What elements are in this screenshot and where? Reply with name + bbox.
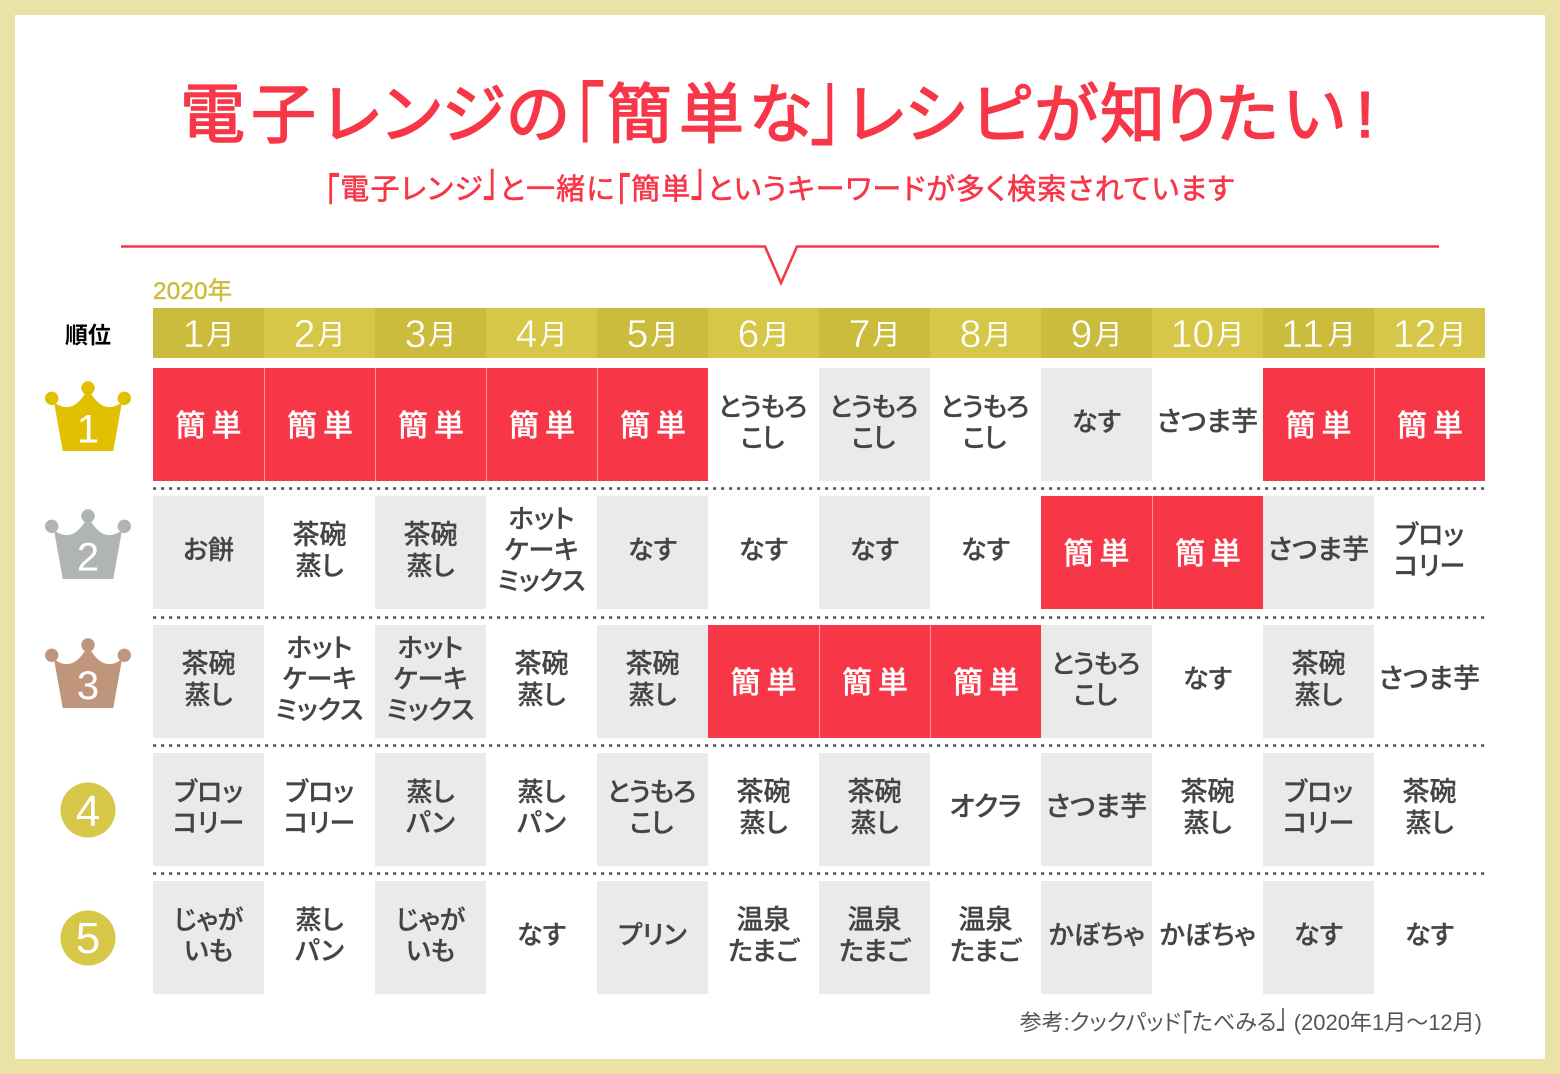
cell: ケーキ — [504, 535, 579, 565]
cell: 簡単 — [1397, 410, 1469, 443]
cell: コリー — [1394, 550, 1465, 580]
cell — [153, 753, 264, 866]
month 6: 月 — [761, 319, 789, 350]
icon: bronze crown rank 3 — [45, 638, 131, 708]
cell: ブロッ — [1284, 776, 1353, 806]
cell — [819, 368, 930, 481]
cell: 簡単 — [730, 667, 802, 700]
cell: たまご — [728, 936, 799, 966]
cell: お餅 — [183, 535, 234, 565]
cell — [1041, 496, 1152, 609]
cell: 茶碗 — [404, 520, 458, 550]
cell — [1402, 776, 1456, 838]
month 7 — [819, 308, 930, 358]
month 1: 月 — [206, 319, 234, 350]
cell: さつま芋 — [1268, 535, 1369, 565]
cell — [718, 392, 806, 452]
cell — [295, 904, 344, 966]
month 6: 6 — [738, 313, 759, 356]
month 8: 月 — [983, 319, 1011, 350]
cell — [597, 625, 708, 738]
cell: とうもろ — [718, 392, 806, 422]
month 3 — [375, 308, 486, 358]
cell — [597, 753, 708, 866]
source note: 参考:クックパッド たべみる (2020年1月〜12月) — [1020, 1010, 1482, 1035]
month 12: 月 — [1438, 319, 1466, 350]
cell: さつま芋 — [1157, 407, 1258, 437]
month 11: 月 — [1328, 319, 1356, 350]
cell: 簡単 — [1286, 410, 1358, 443]
cell: 蒸し — [296, 550, 343, 580]
icon: silver crown rank 2: 2 — [77, 536, 99, 579]
cell: 茶碗 — [1402, 776, 1456, 806]
cell — [153, 625, 264, 738]
cell: こし — [963, 422, 1005, 452]
cell — [1263, 881, 1374, 994]
cell: 蒸し — [850, 808, 898, 838]
cell: 蒸し — [1184, 808, 1231, 838]
cell — [375, 881, 486, 994]
cell: とうもろ — [1051, 648, 1139, 678]
month 7: 7 — [849, 313, 870, 356]
cell — [819, 625, 930, 738]
cell — [1041, 881, 1152, 994]
cell — [1180, 776, 1234, 838]
subtitle: 電子レンジ と一緒に 簡単 というキーワードが多く検索されています — [340, 174, 1235, 206]
cell — [597, 368, 708, 481]
cell: さつま芋 — [1379, 664, 1480, 694]
cell — [1152, 496, 1263, 609]
cell — [819, 753, 930, 866]
cell — [728, 904, 800, 966]
cell: いも — [184, 936, 233, 966]
month 10: 月 — [1216, 319, 1244, 350]
rank 3 row — [153, 625, 1480, 738]
cell: なす — [961, 535, 1010, 565]
source note: 「 — [1181, 1008, 1192, 1048]
cell — [597, 881, 708, 994]
cell: 簡単 — [842, 667, 914, 700]
cell — [940, 392, 1028, 452]
month 9 — [1041, 308, 1152, 358]
cell: 茶碗 — [292, 520, 346, 550]
month 8: 8 — [960, 313, 981, 356]
cell — [498, 504, 585, 596]
month 12 — [1374, 308, 1485, 358]
source note — [1020, 996, 1482, 1048]
cell: ブロッ — [1395, 520, 1464, 550]
cell: 茶碗 — [626, 648, 680, 678]
cell — [1041, 368, 1152, 481]
cell — [284, 776, 355, 838]
month header — [153, 308, 1485, 358]
cell — [1263, 368, 1374, 481]
cell: 蒸し — [740, 808, 787, 838]
cell — [153, 881, 264, 994]
cell — [736, 776, 790, 838]
cell: 蒸し — [1294, 680, 1342, 710]
cell — [486, 368, 597, 481]
cell — [1394, 520, 1465, 580]
cell: 蒸し — [406, 550, 454, 580]
cell: 簡単 — [620, 410, 692, 443]
cell — [375, 753, 486, 866]
cell: 温泉 — [736, 904, 790, 934]
cell: なす — [1405, 920, 1454, 950]
cell: オクラ — [950, 792, 1021, 822]
cell: かぼちゃ — [1049, 920, 1144, 950]
month 10: 10 — [1171, 313, 1214, 356]
icon: gold crown rank 1: 1 — [77, 408, 99, 451]
cell: ブロッ — [285, 776, 354, 806]
cell: 茶碗 — [1292, 648, 1346, 678]
cell: 温泉 — [958, 904, 1012, 934]
cell: とうもろ — [940, 392, 1028, 422]
cell — [1263, 625, 1374, 738]
subtitle — [325, 156, 1235, 224]
cell: なす — [1183, 664, 1232, 694]
cell: 温泉 — [848, 904, 902, 934]
cell: ミックス — [498, 566, 585, 596]
cell: 簡単 — [509, 410, 581, 443]
cell — [1374, 368, 1485, 481]
cell — [597, 496, 708, 609]
month 2 — [264, 308, 375, 358]
cell: 茶碗 — [1180, 776, 1234, 806]
cell: コリー — [1283, 808, 1354, 838]
subtitle: 「 — [615, 173, 631, 224]
speech divider line with notch — [121, 245, 1439, 286]
month 9: 9 — [1071, 313, 1092, 356]
month 2: 月 — [317, 319, 345, 350]
month 12: 12 — [1393, 313, 1436, 356]
subtitle: 」 — [691, 156, 707, 207]
source note: 」 — [1277, 996, 1288, 1036]
cell — [153, 496, 264, 609]
cell — [276, 633, 363, 725]
subtitle: 「 — [325, 173, 340, 224]
month 11: 11 — [1281, 313, 1326, 356]
month 5: 月 — [650, 319, 678, 350]
cell: ケーキ — [282, 664, 357, 694]
cell: なす — [1294, 920, 1343, 950]
cell: 蒸し — [184, 680, 232, 710]
cell: じゃが — [174, 904, 243, 934]
cell: 簡単 — [1175, 538, 1247, 571]
month 1 — [153, 308, 264, 358]
cell: 茶碗 — [736, 776, 790, 806]
cell: 蒸し — [518, 680, 565, 710]
year label: 2020年 — [153, 278, 232, 305]
month 2: 2 — [294, 313, 315, 356]
rank 5 row — [153, 881, 1454, 994]
month 11 — [1263, 308, 1374, 358]
cell — [292, 520, 346, 580]
cell: 茶碗 — [848, 776, 902, 806]
cell — [1263, 496, 1374, 609]
month 1: 1 — [183, 313, 204, 356]
cell — [375, 368, 486, 481]
cell: ブロッ — [174, 776, 243, 806]
cell — [708, 625, 819, 738]
cell — [1041, 753, 1152, 866]
cell: とうもろ — [607, 776, 695, 806]
icon: bronze crown rank 3: 3 — [77, 664, 99, 708]
cell: こし — [852, 422, 894, 452]
cell — [1263, 753, 1374, 866]
month 4: 4 — [516, 313, 537, 356]
cell: さつま芋 — [1046, 792, 1147, 822]
cell — [1041, 625, 1152, 738]
cell: 簡単 — [1064, 538, 1136, 571]
cell: 蒸し — [628, 680, 676, 710]
month 5 — [597, 308, 708, 358]
cell: たまご — [950, 936, 1021, 966]
month 3: 3 — [405, 313, 426, 356]
cell — [819, 496, 930, 609]
month 10 — [1152, 308, 1263, 358]
cell — [950, 904, 1022, 966]
cell — [517, 776, 566, 838]
month 4 — [486, 308, 597, 358]
cell: たまご — [839, 936, 910, 966]
cell: じゃが — [396, 904, 465, 934]
cell: 簡単 — [398, 410, 470, 443]
cell: こし — [741, 422, 783, 452]
rank column heading: 順位 — [65, 322, 111, 348]
cell: 蒸し — [406, 776, 454, 806]
icon: rank 4 badge: 4 — [76, 786, 100, 836]
cell — [153, 368, 264, 481]
cell: かぼちゃ — [1160, 920, 1255, 950]
icon: rank 4 badge — [60, 782, 116, 838]
cell: プリン — [618, 920, 687, 950]
cell: パン — [406, 808, 455, 838]
month 9: 月 — [1094, 319, 1122, 350]
cell: こし — [1074, 680, 1116, 710]
cell: 蒸し — [1406, 808, 1453, 838]
cell: コリー — [284, 808, 355, 838]
cell: ホット — [287, 633, 352, 663]
cell — [514, 648, 568, 710]
cell: コリー — [173, 808, 244, 838]
cell: なす — [739, 535, 788, 565]
cell — [264, 368, 375, 481]
cell: 蒸し — [296, 904, 343, 934]
cell: 茶碗 — [514, 648, 568, 678]
icon: rank 5 badge — [60, 910, 116, 966]
cell — [375, 625, 486, 738]
icon: silver crown rank 2 — [45, 509, 131, 579]
month 7: 月 — [872, 319, 900, 350]
cell: ミックス — [276, 695, 363, 725]
cell: いも — [406, 936, 455, 966]
cell: なす — [1072, 407, 1121, 437]
cell: ホット — [398, 633, 463, 663]
cell: 茶碗 — [182, 648, 236, 678]
month 3: 月 — [428, 319, 456, 350]
month 5: 5 — [627, 313, 648, 356]
icon: gold crown rank 1 — [45, 381, 131, 451]
cell: ケーキ — [393, 664, 468, 694]
cell: 蒸し — [518, 776, 565, 806]
month 6 — [708, 308, 819, 358]
rank 1 row — [153, 368, 1485, 481]
icon: rank 5 badge: 5 — [76, 914, 100, 963]
cell: なす — [850, 535, 899, 565]
cell — [930, 625, 1041, 738]
cell: なす — [628, 535, 677, 565]
cell: 簡単 — [176, 410, 248, 443]
cell — [375, 496, 486, 609]
rank 2 row — [153, 496, 1465, 609]
subtitle: 」 — [484, 156, 499, 207]
cell: ミックス — [387, 695, 474, 725]
title: 電子レンジの簡単なレシピが知りたい! — [180, 78, 1374, 151]
month 4: 月 — [539, 319, 567, 350]
cell: パン — [517, 808, 566, 838]
cell: とうもろ — [829, 392, 917, 422]
cell: ホット — [509, 504, 574, 534]
cell: こし — [630, 808, 672, 838]
cell: なす — [517, 920, 566, 950]
cell — [819, 881, 930, 994]
cell: パン — [295, 936, 344, 966]
month 8 — [930, 308, 1041, 358]
cell: 簡単 — [287, 410, 359, 443]
rank 4 row — [153, 753, 1456, 866]
cell: 簡単 — [953, 667, 1025, 700]
